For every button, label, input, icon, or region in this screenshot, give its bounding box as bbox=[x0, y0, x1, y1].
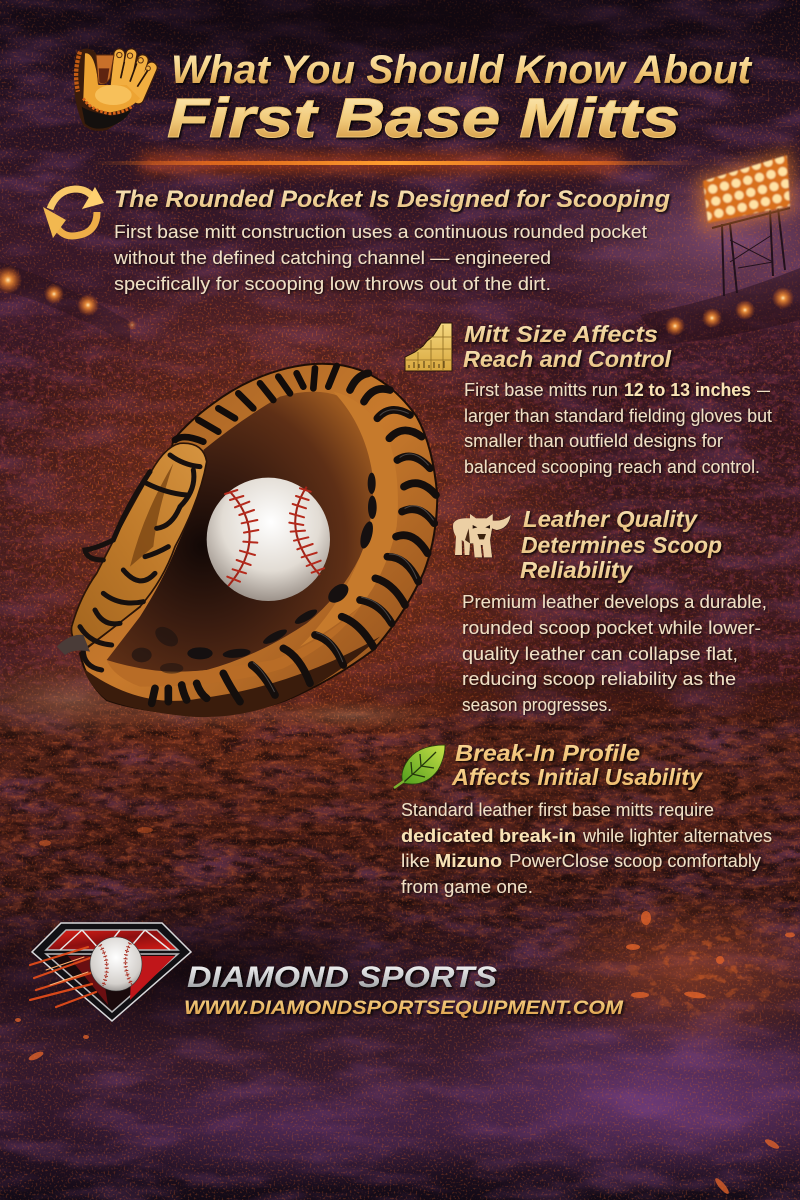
section: rounded pocket bbox=[43, 186, 670, 294]
pocket lace slits bbox=[132, 473, 377, 674]
thumb bbox=[71, 443, 207, 650]
body text: dedicated break-in bbox=[401, 826, 576, 846]
body text: Premium leather develops a durable, bbox=[462, 592, 767, 612]
heading: Determines Scoop bbox=[521, 532, 722, 558]
body text: from game one. bbox=[401, 877, 533, 897]
icon: small catcher mitt bbox=[75, 50, 152, 130]
stadium lights right bbox=[640, 268, 800, 345]
pocket bbox=[107, 392, 373, 672]
glowing embers bbox=[15, 827, 795, 1196]
body text: — bbox=[757, 380, 770, 400]
logo: diamond sports bbox=[30, 923, 624, 1021]
body text: Mizuno bbox=[435, 851, 502, 871]
body text: specifically for scooping low throws out of the dirt. bbox=[114, 274, 551, 294]
palm highlight bbox=[300, 392, 398, 647]
body text: rounded scoop pocket while lower- bbox=[462, 618, 761, 638]
body text bbox=[464, 380, 772, 477]
speed streaks bbox=[30, 947, 96, 1007]
icon: green leaf bbox=[394, 745, 445, 788]
body text: larger than standard fielding gloves but bbox=[464, 406, 772, 426]
icon: ruler chart bbox=[405, 323, 452, 371]
stadium rim and lights left bbox=[0, 262, 137, 345]
title: What You Should Know About bbox=[171, 48, 753, 92]
icon: refresh arrows bbox=[43, 187, 104, 238]
body text: PowerClose bbox=[509, 851, 609, 871]
website url: WWW.DIAMONDSPORTSEQUIPMENT.COM bbox=[184, 997, 624, 1019]
heading: Reliability bbox=[520, 557, 633, 583]
title: First Base Mitts bbox=[167, 86, 680, 149]
title bbox=[167, 48, 753, 149]
body text: 12 to 13 inches bbox=[624, 380, 751, 400]
body text: balanced scooping reach and control. bbox=[464, 457, 760, 477]
diamond emblem bbox=[30, 923, 191, 1021]
body text: quality leather can collapse flat, bbox=[462, 644, 738, 664]
illustration: first base mitt with baseball bbox=[57, 364, 437, 717]
brand name: DIAMOND SPORTS bbox=[187, 961, 497, 994]
heading: Mitt Size Affects bbox=[464, 321, 658, 347]
heading bbox=[451, 740, 703, 790]
body text: reducing scoop reliability as the bbox=[462, 669, 736, 689]
section: break-in profile bbox=[394, 740, 772, 897]
section: leather quality bbox=[453, 506, 767, 715]
body text: First base mitts run bbox=[464, 380, 618, 400]
body text: without the defined catching channel — engineered bbox=[113, 248, 551, 268]
mitt rim bbox=[80, 364, 437, 714]
body text: like bbox=[401, 851, 430, 871]
heading bbox=[463, 321, 672, 372]
right rim laces bbox=[152, 373, 436, 703]
heading: Reach and Control bbox=[463, 346, 672, 372]
body text: First base mitt construction uses a continuous rounded pocket bbox=[114, 222, 647, 242]
baseball bbox=[207, 478, 330, 601]
body text: smaller than outfield designs for bbox=[464, 431, 723, 451]
heading bbox=[520, 506, 722, 583]
icon: bull hide bbox=[453, 514, 511, 557]
heading: Affects Initial Usability bbox=[451, 764, 703, 790]
logo baseball bbox=[90, 937, 142, 991]
body text: scoop comfortably bbox=[614, 851, 761, 871]
body text: Standard leather first base mitts require bbox=[401, 800, 714, 820]
body text: while lighter alternatves bbox=[582, 826, 772, 846]
body text bbox=[462, 592, 767, 715]
section: mitt size bbox=[405, 321, 772, 477]
top rim laces bbox=[175, 366, 337, 442]
heading: Break-In Profile bbox=[455, 740, 640, 766]
heading: The Rounded Pocket Is Designed for Scooping bbox=[114, 186, 670, 213]
divider glow line bbox=[90, 156, 700, 170]
floodlight tower bbox=[696, 148, 796, 296]
body text bbox=[113, 222, 647, 294]
heading: Leather Quality bbox=[523, 506, 698, 532]
body text bbox=[401, 800, 772, 897]
thumb laces bbox=[80, 455, 200, 670]
body text: season progresses. bbox=[462, 695, 612, 715]
